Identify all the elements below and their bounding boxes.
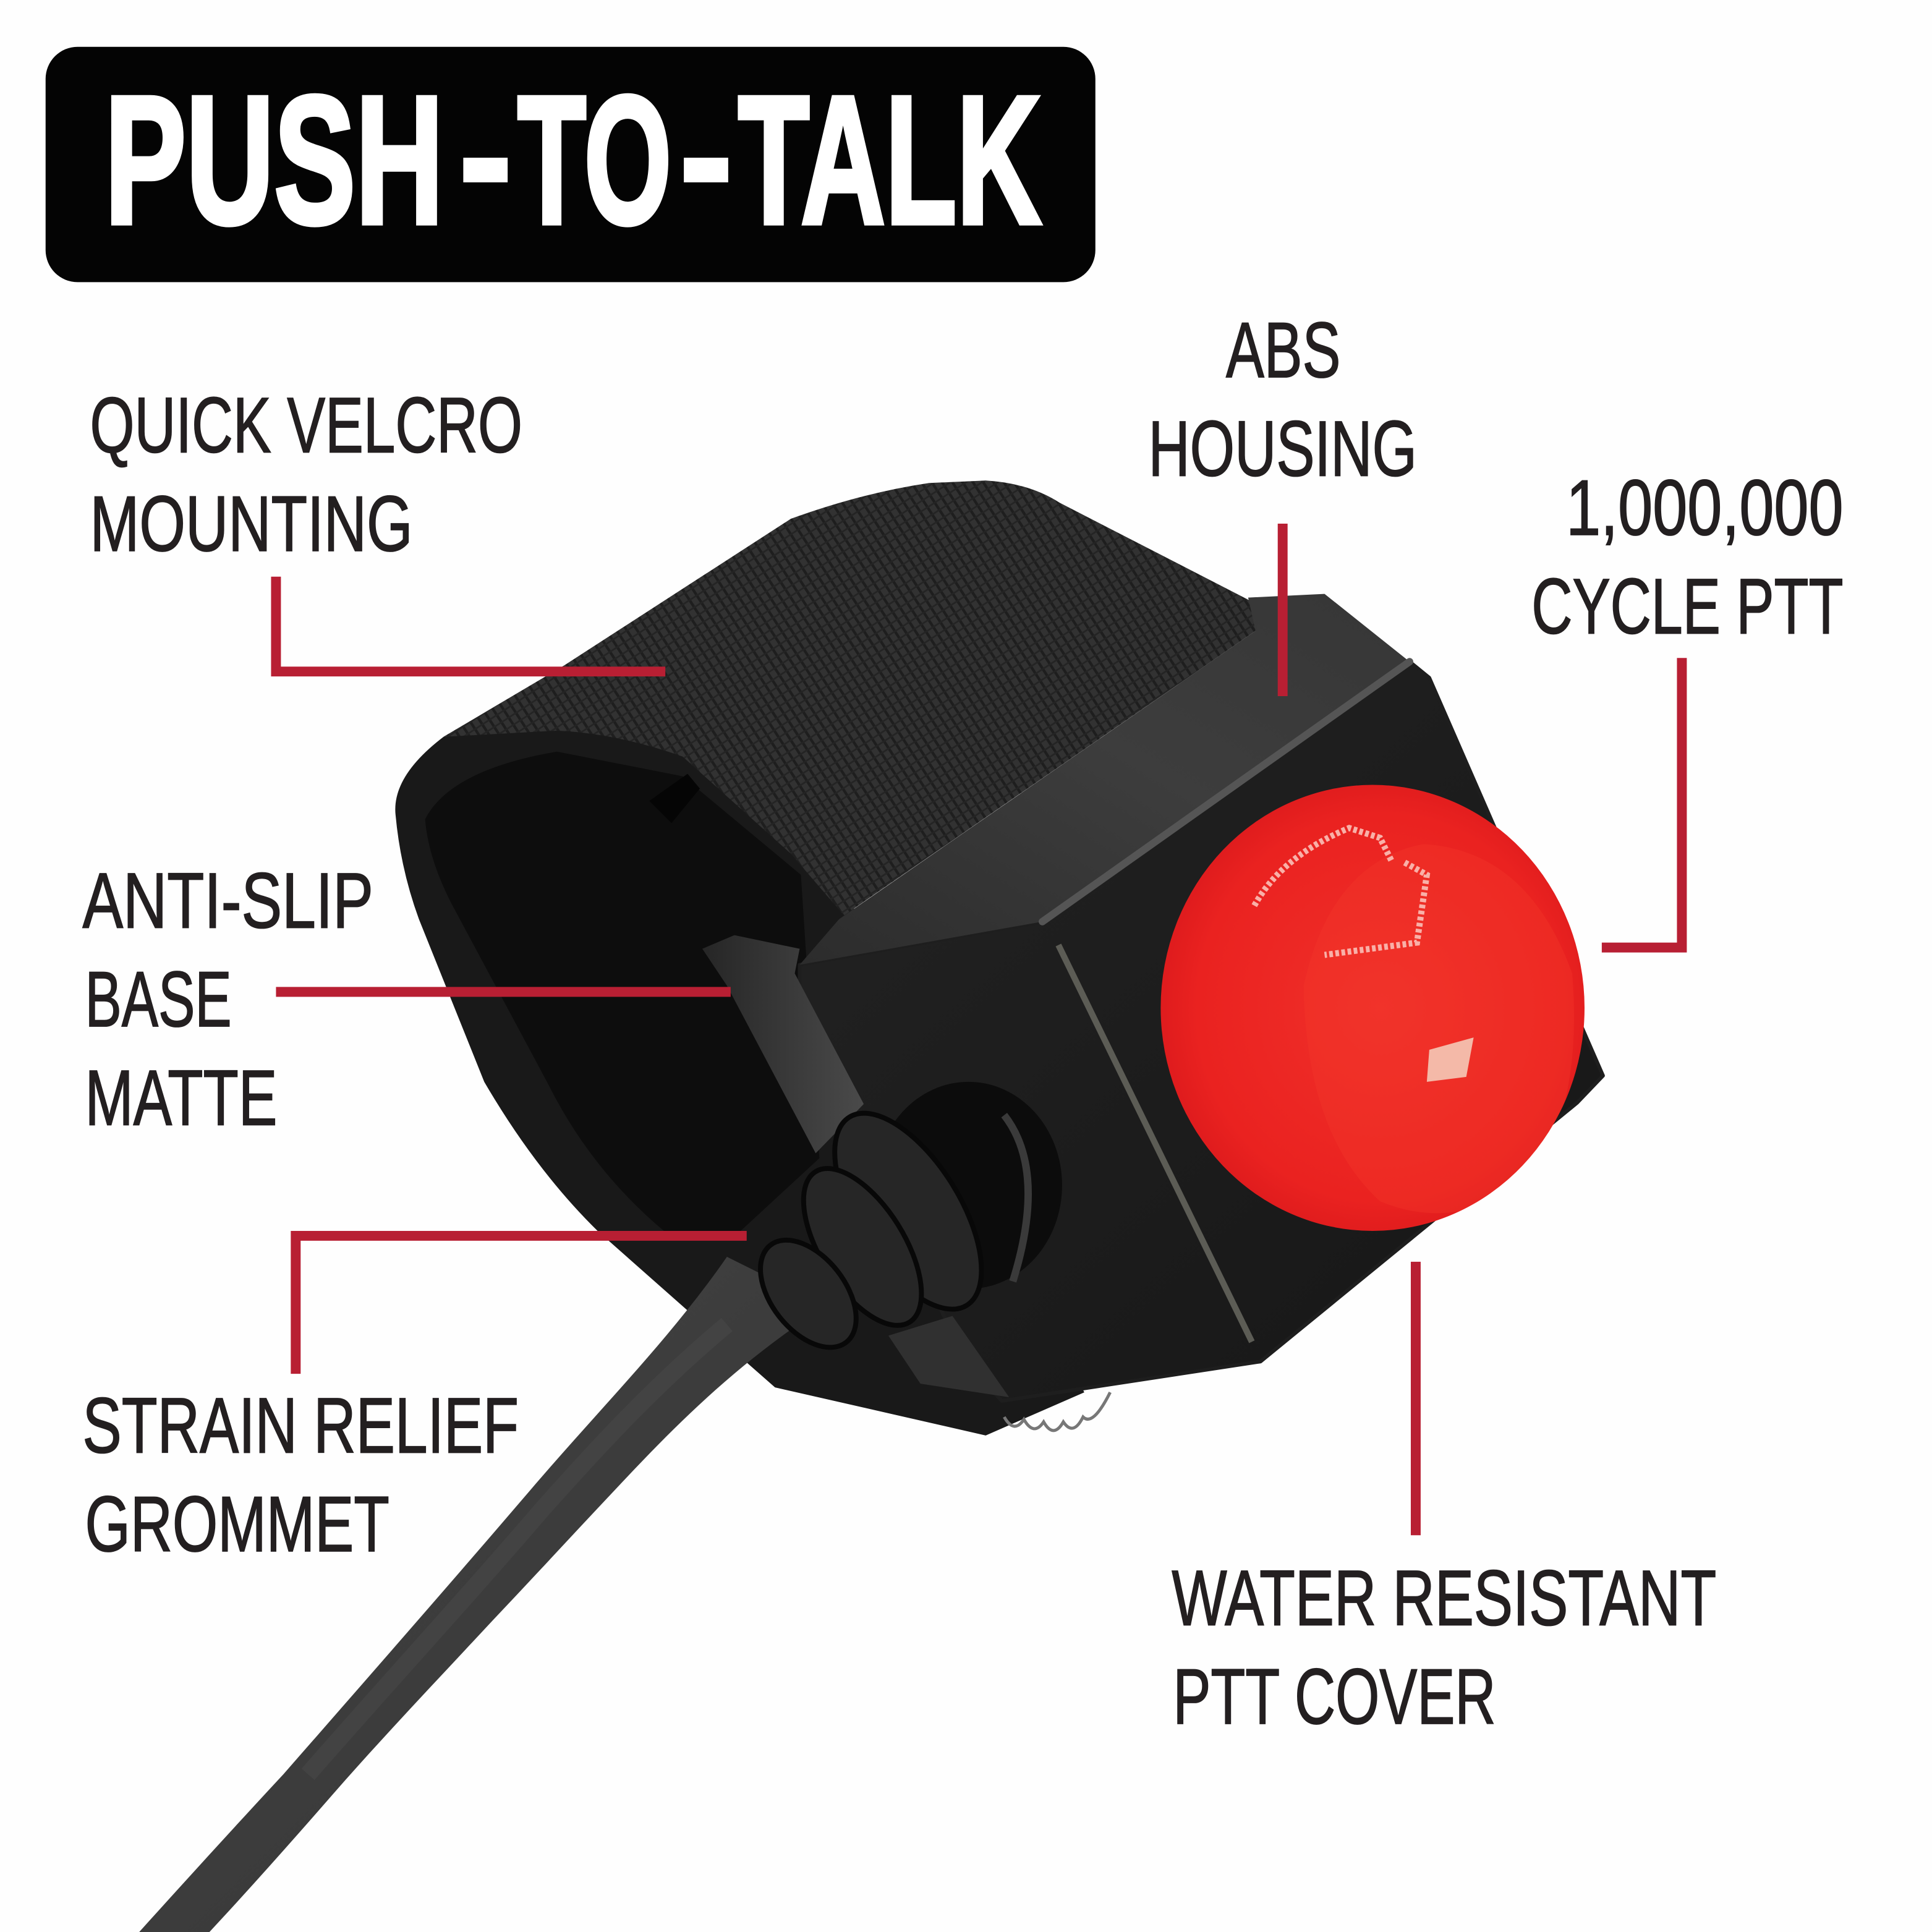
label: anti-slip base matte <box>83 857 373 1143</box>
label: abs housing: HOUSING <box>1148 405 1417 493</box>
label: anti-slip base matte: MATTE <box>85 1055 277 1143</box>
woven strap <box>443 480 1275 916</box>
label: 1,000,000 cycle ptt: 1,000,000 <box>1566 464 1844 552</box>
title banner: PUSH <box>104 58 443 262</box>
callout line: water resistant <box>1413 1262 1418 1535</box>
label: quick velcro mounting: QUICK VELCRO <box>90 381 522 469</box>
label: anti-slip base matte: BASE <box>85 956 232 1044</box>
product photo illustration: push-to-talk button <box>139 480 1603 1932</box>
label: strain relief grommet: STRAIN RELIEF <box>83 1382 519 1470</box>
button highlights <box>1254 828 1427 955</box>
label: strain relief grommet <box>83 1382 519 1568</box>
label: strain relief grommet: GROMMET <box>85 1481 389 1568</box>
callout line: abs housing <box>1280 524 1285 696</box>
label: quick velcro mounting: MOUNTING <box>90 480 413 568</box>
housing top face <box>799 594 1410 965</box>
label: water resistant ptt cover: WATER RESISTANT <box>1172 1555 1716 1643</box>
callout line: anti-slip base <box>276 989 731 994</box>
strap slot <box>649 774 700 823</box>
callout line: strain relief <box>296 1236 747 1374</box>
callout line: cycle ptt <box>1602 658 1682 948</box>
cable highlight <box>308 1324 727 1774</box>
label: water resistant ptt cover <box>1172 1555 1716 1741</box>
red button cover <box>1160 785 1585 1231</box>
strain relief ribs <box>741 1090 1011 1365</box>
callout line: velcro <box>276 577 665 671</box>
label: 1,000,000 cycle ptt <box>1531 464 1844 650</box>
button reflection <box>1427 1037 1474 1082</box>
label: water resistant ptt cover: PTT COVER <box>1173 1653 1496 1741</box>
cable <box>139 1257 825 1932</box>
label: quick velcro mounting <box>90 381 522 568</box>
grommet collar <box>875 1082 1062 1289</box>
velcro strap back loop <box>395 519 1084 1436</box>
label: abs housing: ABS <box>1226 307 1340 394</box>
title banner: TO <box>517 58 671 262</box>
button inner dome <box>1416 1052 1573 1213</box>
strap inner padding <box>425 752 819 1232</box>
grommet gloss ring <box>1004 1115 1028 1282</box>
housing edge highlight <box>1042 662 1410 922</box>
anti-slip base <box>702 935 864 1153</box>
velcro hook scrap <box>1004 1392 1110 1431</box>
title banner <box>46 47 1096 282</box>
lower base <box>888 1316 1009 1397</box>
housing front face <box>799 662 1603 1401</box>
label: anti-slip base matte: ANTI-SLIP <box>83 857 373 945</box>
title banner: TALK <box>738 58 1041 262</box>
label: abs housing <box>1148 307 1417 493</box>
housing ridge <box>1058 945 1252 1342</box>
